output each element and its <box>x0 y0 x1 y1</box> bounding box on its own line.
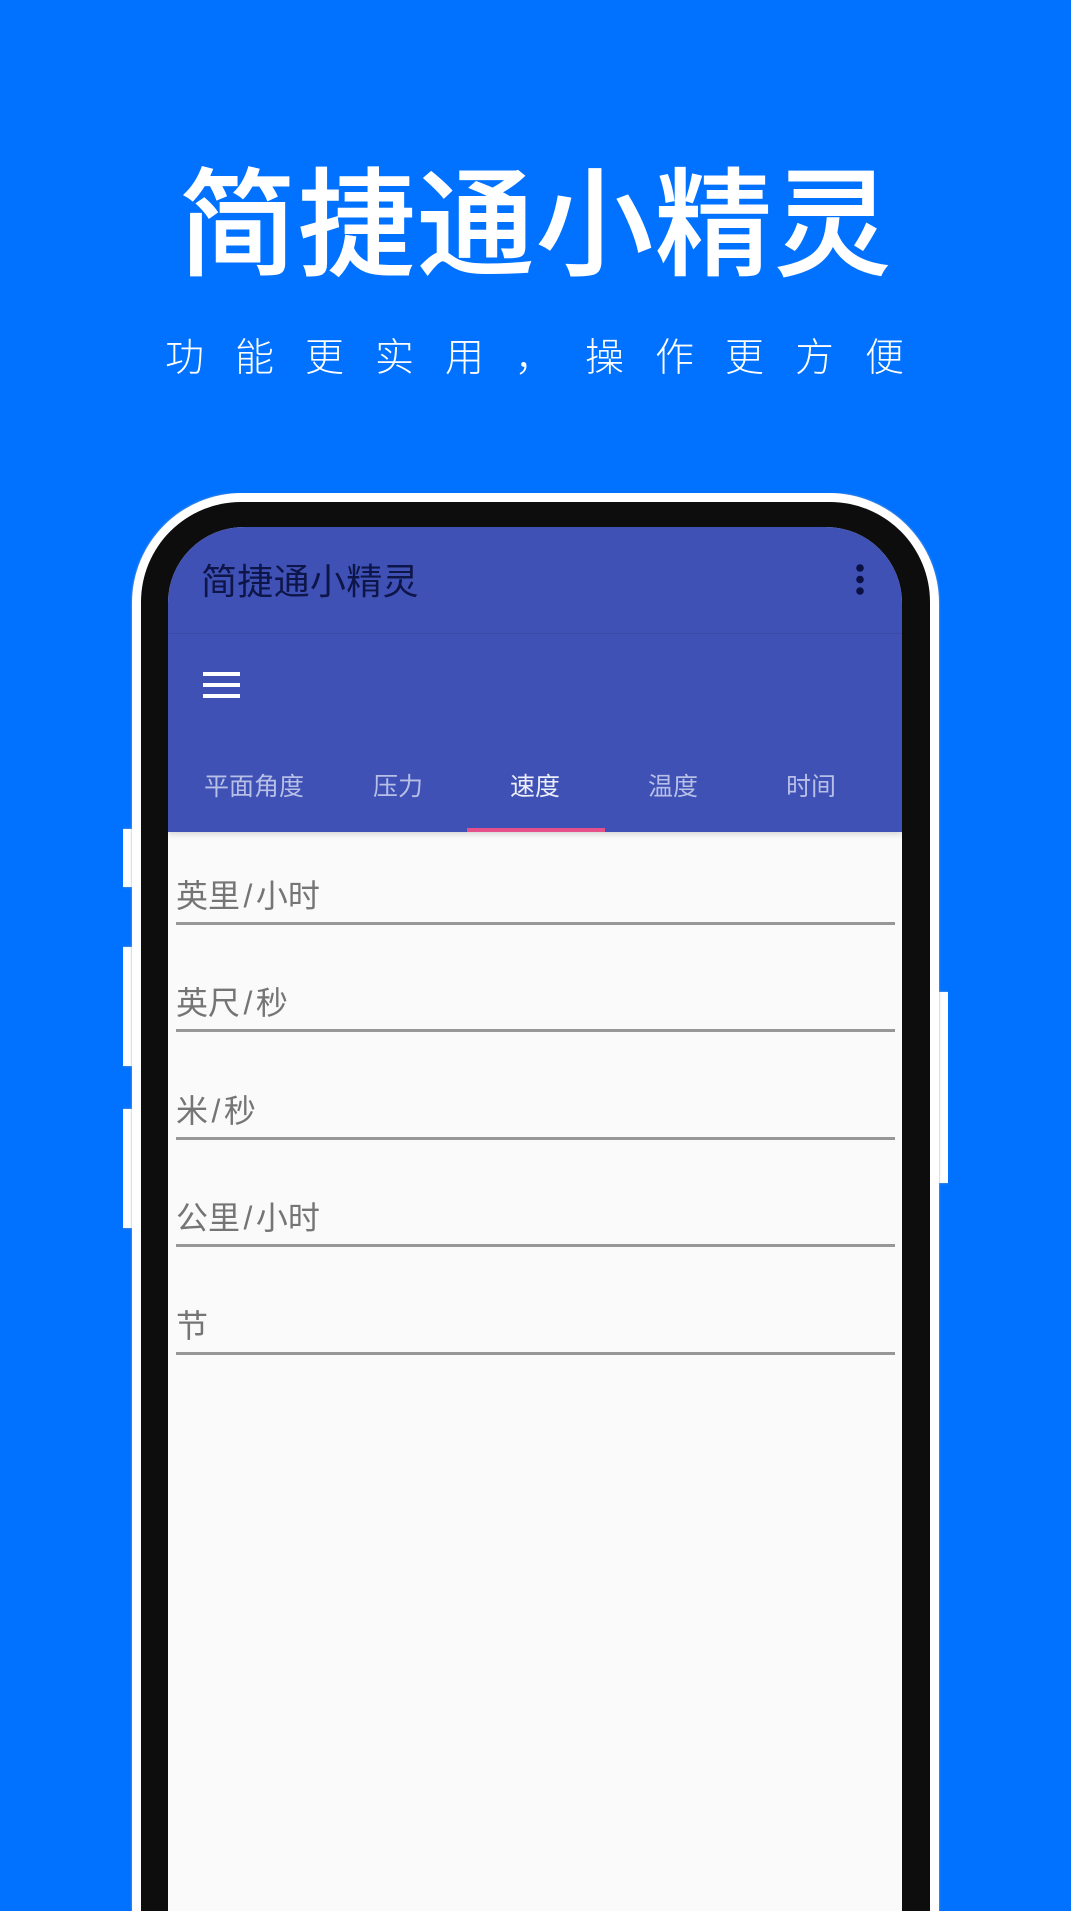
field label: 米/秒 <box>176 1093 256 1129</box>
tab: 温度: 温度 <box>648 773 698 801</box>
field: 英里/小时 <box>176 878 895 925</box>
field: 节 <box>176 1308 895 1355</box>
side button: left lower <box>123 1109 135 1228</box>
phone mockup <box>123 493 948 1911</box>
active tab indicator <box>467 828 605 832</box>
app screen <box>168 527 902 1911</box>
side button: left upper <box>123 829 135 887</box>
field: 英尺/秒 <box>176 985 895 1032</box>
field label: 节 <box>176 1308 208 1344</box>
tab: 时间: 时间 <box>786 773 836 801</box>
field: 米/秒 <box>176 1093 895 1140</box>
field label: 公里/小时 <box>176 1200 320 1236</box>
tab: 压力: 压力 <box>373 773 423 801</box>
icon: overflow menu <box>856 564 864 595</box>
field label: 英尺/秒 <box>176 985 288 1021</box>
side button: left middle <box>123 947 135 1066</box>
field label: 英里/小时 <box>176 878 320 914</box>
tab: 平面角度: 平面角度 <box>204 773 304 801</box>
field: 公里/小时 <box>176 1200 895 1247</box>
phone black bezel <box>141 502 930 1911</box>
phone white shell <box>132 493 939 1911</box>
title: 简捷通小精灵 <box>179 160 893 291</box>
app header bar <box>168 527 902 832</box>
icon: hamburger menu <box>203 672 240 698</box>
side button: right <box>936 992 948 1183</box>
tab: 速度 active: 速度 <box>510 773 560 801</box>
toolbar divider <box>168 633 902 634</box>
subtitle: 功能更实用，操作更方便 <box>165 337 935 380</box>
app title: 简捷通小精灵 <box>201 561 419 602</box>
